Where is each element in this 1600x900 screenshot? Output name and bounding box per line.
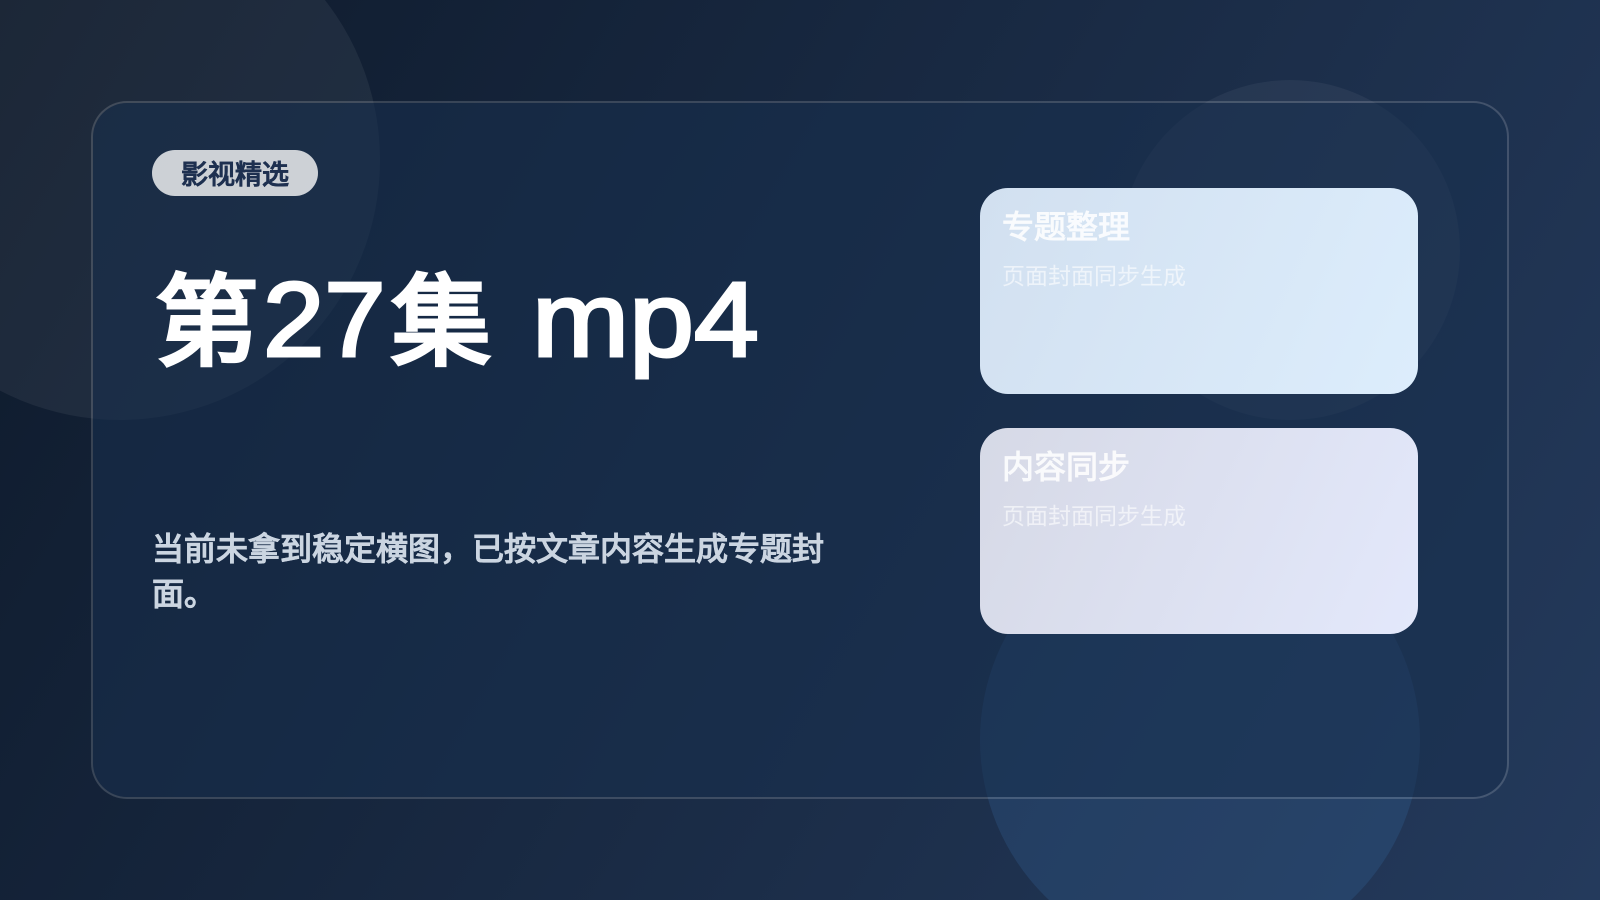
decorative circle: bottom right bbox=[980, 520, 1420, 900]
card caption: 页面封面同步生成 bbox=[1002, 503, 1186, 529]
card: topic bbox=[980, 188, 1418, 394]
decorative circle: top right bbox=[1120, 80, 1460, 420]
card heading: 专题整理 bbox=[1002, 209, 1130, 245]
title: 第 bbox=[155, 267, 259, 379]
card caption: 页面封面同步生成 bbox=[1002, 263, 1186, 289]
card heading: 内容同步 bbox=[1002, 449, 1130, 485]
description text: 当前未拿到稳定横图，已按文章内容生成专题封面。 bbox=[152, 531, 824, 612]
title bbox=[155, 261, 758, 380]
title: 集 bbox=[391, 267, 491, 379]
badge: category pill bbox=[152, 150, 318, 196]
main glass panel bbox=[91, 101, 1509, 799]
decorative circle: top left bbox=[0, 0, 380, 420]
title: 27 bbox=[263, 261, 386, 379]
badge: category pill: 影视精选 bbox=[181, 160, 289, 190]
title: mp4 bbox=[532, 261, 758, 379]
card: content sync bbox=[980, 428, 1418, 634]
